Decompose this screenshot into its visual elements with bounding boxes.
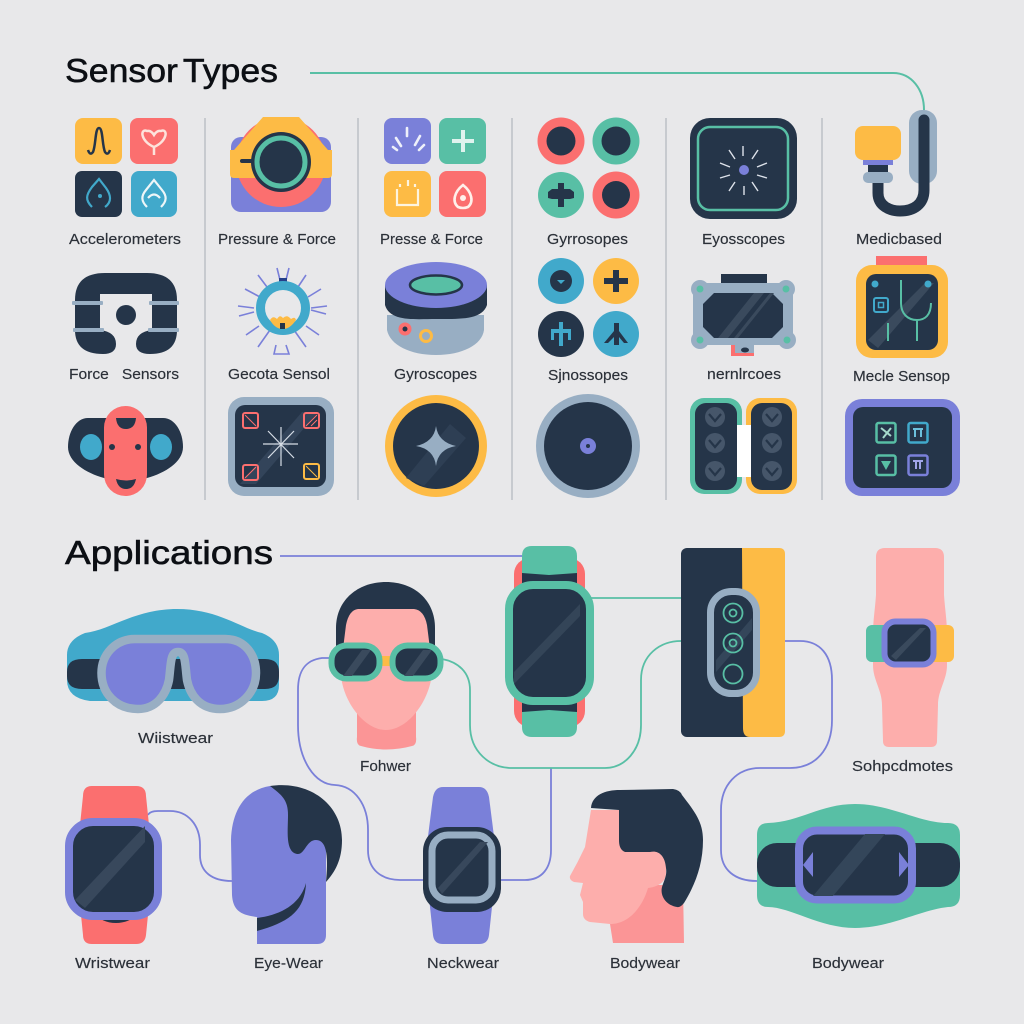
illustration: pedometer device (681, 548, 785, 737)
label: Accelerometers: Accelerometers (69, 232, 181, 248)
icon: pressure camera (230, 117, 332, 212)
label: Bodywear center: Bodywear (610, 956, 680, 972)
icon: eyosscope square dial (690, 118, 797, 219)
illustration: head with glasses (332, 582, 440, 750)
icon: medical tube sensor (855, 110, 937, 211)
illustration: pink wrist band (866, 548, 954, 747)
label: Gyrrosopes: Gyrrosopes (547, 232, 628, 248)
connectors: application links (148, 598, 832, 881)
icon: force sensor clamp (72, 273, 179, 354)
label: Gecota Sensol: Gecota Sensol (228, 367, 330, 383)
label: Sjnossopes: Sjnossopes (548, 368, 628, 384)
connector: Sensor Types line (310, 73, 924, 110)
label: Pressure & Force: Pressure & Force (218, 232, 336, 248)
icon: gyroscope puck (385, 262, 487, 355)
label: Sohpodmotes: Sohpcdmotes (852, 759, 953, 775)
label: Force Sensors: Force Sensors (69, 367, 179, 383)
illustration: green body belt (757, 804, 960, 928)
illustration: purple head profile (231, 785, 342, 944)
illustration: goggles (67, 609, 279, 709)
label: Wristwear: Wristwear (75, 956, 150, 972)
icon: gyro four small circles (538, 258, 639, 357)
illustration: green smartwatch (509, 546, 590, 737)
label: Mecle Sensop: Mecle Sensop (853, 369, 950, 385)
label: Medicbased: Medicbased (856, 232, 942, 248)
icon: accelerometers four tiles (75, 118, 178, 217)
icon: grey ring disc (536, 394, 640, 498)
icon: gyrroscope four circles (538, 118, 640, 218)
connector: Applications line (280, 555, 522, 557)
title: Applications: Applications (65, 535, 273, 572)
label: nernlrcoes: nernlrcoes (707, 367, 781, 383)
panel: sensor types grid (68, 110, 960, 498)
label: Wiistwear: Wiistwear (138, 731, 213, 747)
icon: yellow ring star dial (385, 395, 487, 497)
icon: twin chevron panels (690, 398, 797, 494)
label: Bodywear right: Bodywear (812, 956, 884, 972)
icon: rugged frame device (691, 274, 796, 356)
illustration: coral wrist watch (69, 786, 158, 944)
label: Neckwear: Neckwear (427, 956, 499, 972)
illustration: purple neck watch (423, 787, 501, 944)
label: Presse & Force: Presse & Force (380, 232, 483, 248)
title: Sensor Types: Sensor Types (65, 53, 278, 90)
icon: presse four tiles (384, 118, 486, 217)
label: Gyroscopes: Gyroscopes (394, 367, 477, 383)
icon: radial ring sensor (238, 268, 327, 354)
icon: medical square sensor (856, 256, 948, 358)
label: Fohwer: Fohwer (360, 759, 411, 775)
icon: face band pill (68, 406, 183, 496)
label: Eyosscopes: Eyosscopes (702, 232, 785, 248)
label: Eye-Wear: Eye-Wear (254, 956, 323, 972)
icon: square star display (228, 397, 334, 496)
illustration: man side profile (570, 789, 703, 943)
icon: purple square grid (845, 399, 960, 496)
